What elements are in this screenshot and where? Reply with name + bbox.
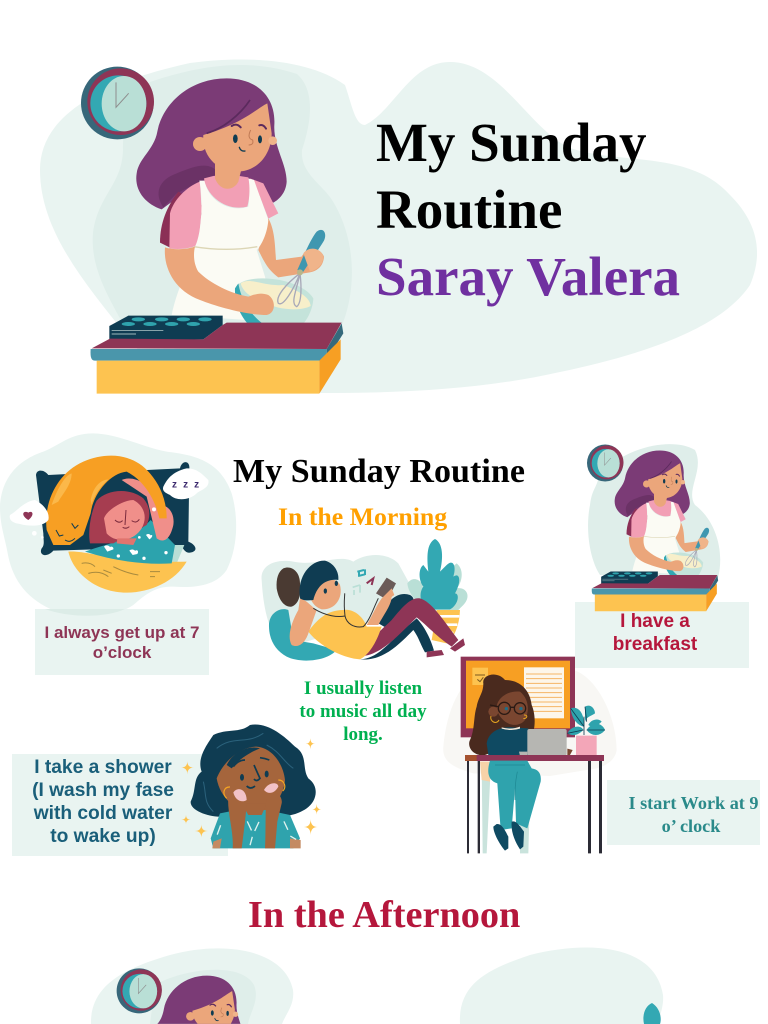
illustration: washing face [181,724,321,848]
caption box: shower: (I wash my fase [32,780,174,801]
title: My Sunday [376,112,647,173]
caption box: start work [607,780,760,845]
top background blobs [40,59,757,393]
caption text: breakfast: I have a [620,611,690,632]
caption box: breakfast [575,602,749,668]
caption box: shower: I take a shower [34,757,172,778]
section heading: My Sunday Routine: My Sunday Routine [233,453,525,490]
caption: music: to music all day [299,701,427,722]
illustration: working at desk [443,657,617,853]
illustration: baker small [587,444,720,611]
caption box: start work: o’ clock [662,816,721,836]
illustration: listening to music [262,539,468,661]
illustration: sleeping girl and cat [0,433,236,616]
illustration: baker afternoon [91,948,293,1024]
caption box: shower [12,754,228,856]
caption box: get up: o’clock [93,643,152,662]
caption box: get up [35,609,209,675]
caption text: breakfast: breakfast [613,634,698,655]
section heading: In the Afternoon: In the Afternoon [248,894,520,936]
caption box: start work: I start Work at 9 [628,793,759,813]
caption text: breakfast [613,611,698,655]
caption: music [299,678,427,745]
caption box: get up: I always get up at 7 [45,623,199,642]
label: zzz: z z z [172,480,201,491]
title: Routine [376,179,562,240]
caption box: shower: to wake up) [50,826,156,847]
title: Saray Valera [376,246,680,307]
section heading: In the Morning: In the Morning [278,502,447,531]
caption: music: long. [343,724,383,745]
title [376,112,680,307]
illustration: afternoon blob with plant [460,948,663,1024]
illustration: baker hero [81,67,343,394]
caption: music: I usually listen [304,678,423,699]
caption box: shower: with cold water [33,803,173,824]
